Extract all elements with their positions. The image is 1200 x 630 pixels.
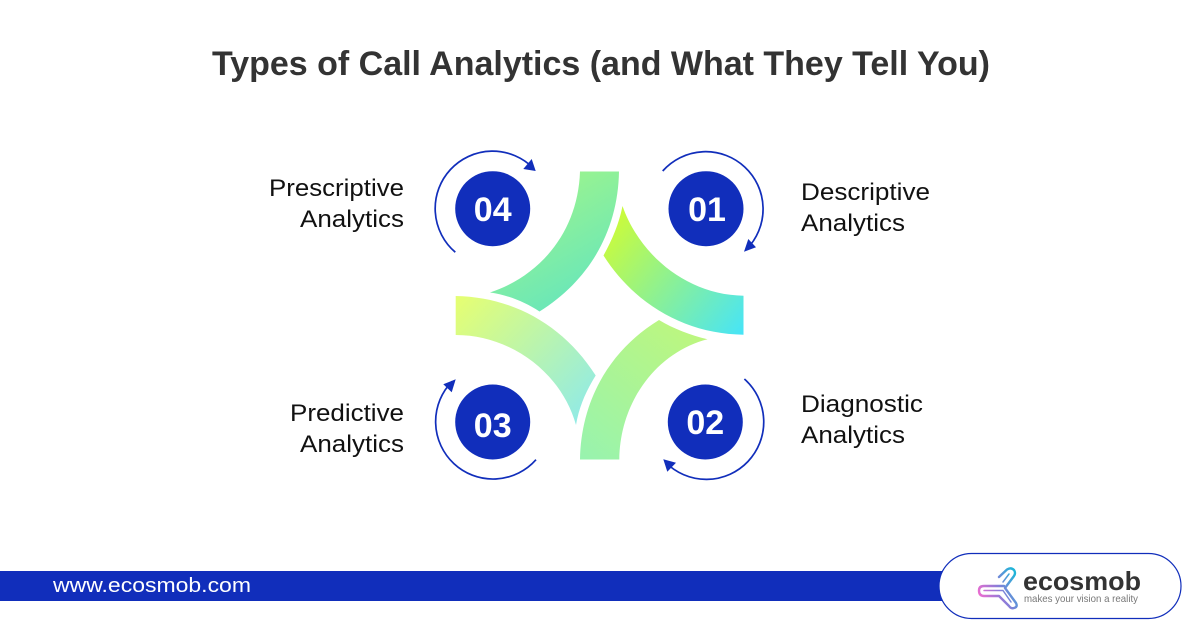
segment 02 bbox=[580, 320, 708, 460]
segment 03 bbox=[456, 296, 596, 425]
logo tagline: makes your vision a reality bbox=[1024, 593, 1139, 605]
step 04 badge: 04 bbox=[474, 191, 512, 229]
logo pill bbox=[939, 554, 1181, 618]
diagram: four curved segments bbox=[456, 172, 744, 460]
step 02 badge bbox=[663, 379, 764, 479]
arrow 01 bbox=[663, 152, 763, 252]
arrow 04 bbox=[435, 151, 536, 252]
segment 04 bbox=[490, 172, 619, 312]
website url: www.ecosmob.com bbox=[52, 575, 251, 597]
step 03 badge bbox=[436, 379, 536, 479]
label: Predictive Analytics: Predictive bbox=[290, 400, 404, 427]
step 01 badge bbox=[663, 152, 763, 252]
label: Prescriptive Analytics bbox=[269, 175, 404, 233]
label: Descriptive Analytics bbox=[801, 179, 930, 237]
label: Descriptive Analytics: Analytics bbox=[801, 210, 905, 237]
step 04 badge bbox=[435, 151, 536, 252]
arrow 02 bbox=[663, 379, 764, 479]
segment 01 bbox=[604, 206, 744, 335]
label: Predictive Analytics: Analytics bbox=[300, 431, 404, 458]
label: Diagnostic Analytics bbox=[801, 391, 923, 449]
icon: ecosmob logo mark bbox=[979, 568, 1017, 608]
label: Descriptive Analytics: Descriptive bbox=[801, 179, 930, 206]
arrow 03 bbox=[436, 379, 536, 479]
step 01 badge: 01 bbox=[688, 191, 726, 229]
label: Predictive Analytics bbox=[290, 400, 404, 458]
footer bar bbox=[0, 571, 945, 601]
title: Types of Call Analytics (and What They Tell You) bbox=[212, 45, 990, 83]
label: Prescriptive Analytics: Prescriptive bbox=[269, 175, 404, 202]
label: Diagnostic Analytics: Analytics bbox=[801, 422, 905, 449]
step 03 badge: 03 bbox=[474, 407, 512, 445]
label: Prescriptive Analytics: Analytics bbox=[300, 206, 404, 233]
label: Diagnostic Analytics: Diagnostic bbox=[801, 391, 923, 418]
logo wordmark: ecosmob bbox=[1023, 566, 1141, 596]
step 02 badge: 02 bbox=[686, 404, 724, 442]
